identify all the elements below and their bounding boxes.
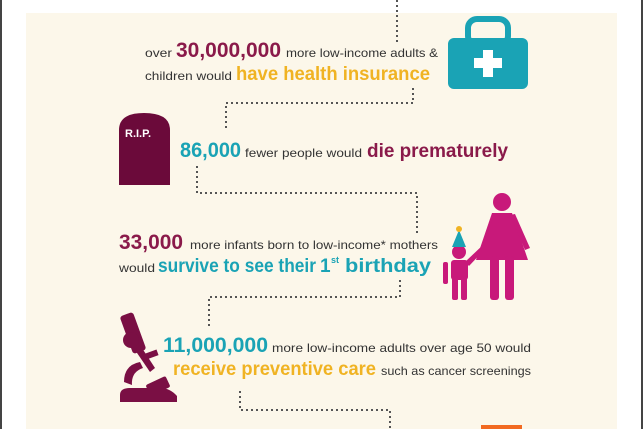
text block: health insurance: [145, 39, 438, 85]
text block: preventive care: such as cancer screenings: [381, 364, 531, 378]
text block: health insurance: have health insurance: [236, 64, 430, 85]
text block: infants: st: [331, 255, 339, 265]
text block: preventive care: receive preventive care: [173, 359, 376, 380]
text block: health insurance: over: [145, 46, 172, 60]
icon: tombstone: [119, 113, 170, 185]
text block: health insurance: more low-income adults &: [286, 46, 438, 60]
text block: premature deaths: [180, 139, 508, 162]
text block: infants: survive to see their: [158, 256, 317, 277]
text block: infants: 1: [320, 256, 331, 277]
text block: health insurance: 30,000,000: [176, 39, 281, 62]
text block: infants: [118, 231, 438, 277]
text block: health insurance: children would: [145, 69, 232, 83]
text block: premature deaths: 86,000: [180, 139, 241, 162]
icon: medical kit: [448, 19, 528, 89]
text block: infants: birthday: [345, 256, 431, 277]
icon: tombstone: R.I.P.: [125, 128, 151, 140]
text block: premature deaths: die prematurely: [367, 141, 508, 162]
dotted connector lines: [197, 0, 417, 429]
text block: infants: more infants born to low-income* mothers: [190, 238, 438, 252]
icon: microscope: [120, 312, 177, 402]
text block: infants: would: [118, 261, 155, 275]
icon: orange block (cut off): [481, 425, 522, 429]
text block: preventive care: [163, 334, 531, 380]
icon: mother and child: [443, 193, 530, 300]
text block: preventive care: more low-income adults over age 50 would: [272, 341, 531, 355]
text block: premature deaths: fewer people would: [245, 146, 362, 160]
text block: infants: 33,000: [119, 231, 183, 254]
text block: preventive care: 11,000,000: [163, 334, 268, 357]
